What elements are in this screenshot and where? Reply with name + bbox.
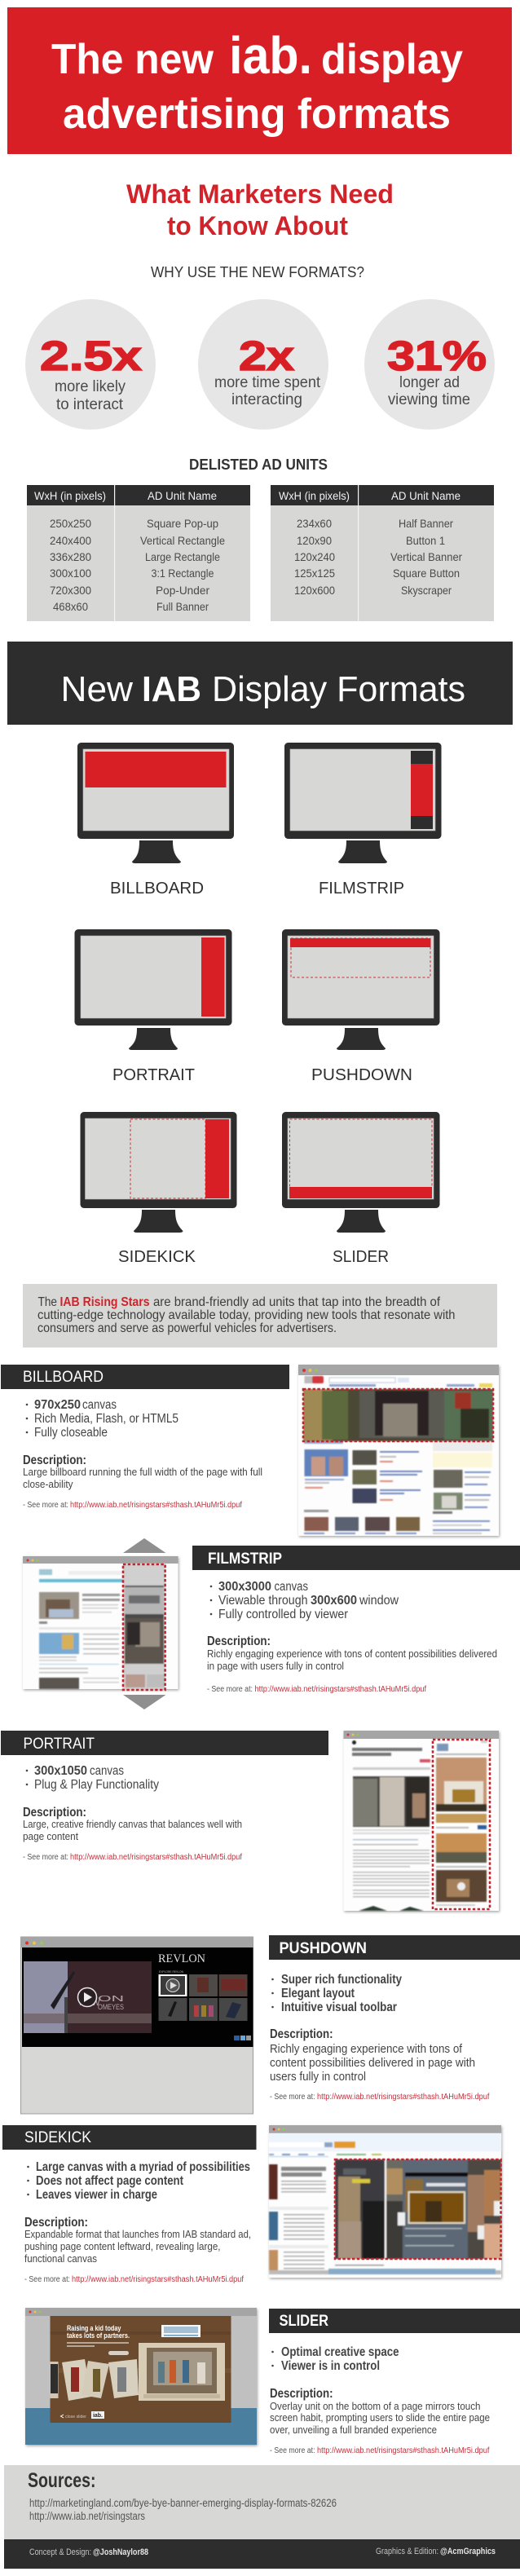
slider description: screen habit, prompting users to slide the entire page: [270, 2411, 490, 2424]
pushdown description: users fully in control: [270, 2070, 366, 2084]
section banner: new IAB display formats: [7, 642, 513, 725]
billboard screenshot: [298, 1365, 499, 1536]
sources panel: [4, 2465, 520, 2539]
billboard feature list: Fully closeable: [34, 1426, 108, 1440]
billboard description: Large billboard running the full width of the page with full: [23, 1466, 262, 1478]
callout: IAB rising stars: IAB Rising Stars: [60, 1295, 150, 1309]
table: delisted units left: 720x300: [50, 584, 91, 597]
slider heading: SLIDER: [279, 2313, 328, 2330]
sidekick screenshot: [269, 2125, 501, 2278]
filmstrip feature list: Viewable through: [218, 1594, 308, 1608]
sidekick heading: SIDEKICK: [24, 2129, 91, 2146]
slider screenshot: Raising a kid today: [67, 2324, 121, 2332]
table: delisted units left: Large Rectangle: [145, 550, 220, 563]
table: delisted units left: 3:1 Rectangle: [152, 567, 214, 580]
monitor: portrait: PORTRAIT: [112, 1066, 195, 1084]
billboard description: close-ability: [23, 1478, 73, 1490]
billboard description: - See more at:: [23, 1501, 68, 1510]
sources panel: http://marketingland.com/bye-bye-banner-emerging-display-formats-82626: [29, 2497, 337, 2509]
slider screenshot: iab.: [93, 2413, 103, 2419]
filmstrip heading: FILMSTRIP: [208, 1550, 282, 1568]
monitor: filmstrip: FILMSTRIP: [319, 880, 404, 898]
sidekick description: Expandable format that launches from IAB standard ad,: [24, 2228, 251, 2240]
section banner: new IAB display formats: Display Formats: [212, 669, 465, 709]
filmstrip down arrow: [123, 1695, 166, 1709]
filmstrip up arrow: [123, 1538, 166, 1553]
table: delisted units left: WxH (in pixels): [34, 489, 106, 502]
footer credits: @AcmGraphics: [440, 2547, 496, 2556]
monitor: slider: [282, 1112, 440, 1266]
filmstrip feature list: window: [359, 1594, 399, 1608]
billboard feature list: [26, 1398, 178, 1440]
filmstrip description: - See more at:: [207, 1685, 253, 1694]
filmstrip screenshot: [23, 1556, 178, 1690]
sidekick description: Description:: [24, 2216, 88, 2230]
sidekick description: functional canvas: [24, 2252, 97, 2265]
billboard description: http://www.iab.net/risingstars#sthash.tAHuMr5i.dpuf: [70, 1501, 242, 1510]
heading: delisted ad units: DELISTED AD UNITS: [189, 456, 328, 473]
pushdown description: content possibilities delivered in page with: [270, 2056, 475, 2070]
sidekick heading: [2, 2125, 256, 2150]
slider heading: [269, 2309, 520, 2333]
filmstrip feature list: 300x3000: [218, 1580, 271, 1594]
callout: IAB rising stars: [23, 1284, 497, 1348]
monitor: billboard: BILLBOARD: [110, 880, 204, 898]
table: delisted units left: Pop-Under: [156, 584, 209, 597]
slider feature list: Viewer is in control: [281, 2359, 380, 2373]
table: delisted units left: 336x280: [50, 550, 91, 563]
table: delisted units left: Full Banner: [156, 600, 209, 613]
monitor: sidekick: [80, 1112, 236, 1266]
table: delisted units left: Square Pop-up: [147, 517, 218, 530]
portrait heading: PORTRAIT: [23, 1736, 95, 1753]
table: delisted units right: Skyscraper: [401, 584, 452, 597]
filmstrip description: Description:: [207, 1634, 271, 1648]
portrait heading: [1, 1731, 328, 1755]
stat circle: 2x: more time spent: [214, 374, 321, 391]
panel: sidekick: [2, 2125, 501, 2284]
portrait description: - See more at:: [23, 1853, 68, 1862]
table: delisted units left: [27, 485, 250, 621]
billboard heading: BILLBOARD: [23, 1369, 104, 1386]
section banner: new IAB display formats: New: [60, 669, 133, 709]
callout: IAB rising stars: The: [37, 1295, 57, 1309]
filmstrip feature list: 300x600: [311, 1594, 357, 1608]
footer credits: Concept & Design:: [29, 2547, 91, 2557]
monitor: pushdown: PUSHDOWN: [311, 1066, 412, 1084]
billboard feature list: Rich Media, Flash, or HTML5: [34, 1412, 178, 1426]
sidekick description: http://www.iab.net/risingstars#sthash.tAHuMr5i.dpuf: [72, 2275, 244, 2284]
table: delisted units right: 120x90: [297, 534, 332, 547]
footer credits: @JoshNaylor88: [93, 2547, 148, 2557]
heading: what marketers need to know: [126, 179, 394, 240]
stat circle: 31%: 31%: [387, 333, 487, 379]
callout: IAB rising stars: cutting-edge technology available today, providing new tools that resonate with: [37, 1308, 455, 1322]
portrait feature list: Plug & Play Functionality: [34, 1778, 159, 1792]
panel: filmstrip: [23, 1538, 520, 1709]
portrait feature list: [26, 1764, 159, 1792]
table: delisted units right: 125x125: [294, 567, 335, 580]
pushdown screenshot: [20, 1937, 253, 2114]
sources panel: http://www.iab.net/risingstars: [29, 2510, 145, 2522]
callout: IAB rising stars: consumers and serve as powerful vehicles for advertisers.: [37, 1321, 337, 1335]
stat circle: 31%: [364, 299, 495, 430]
panel: billboard: [1, 1365, 499, 1536]
filmstrip feature list: Fully controlled by viewer: [218, 1608, 348, 1621]
slider screenshot: close slider: [65, 2415, 86, 2419]
billboard heading: [1, 1365, 289, 1389]
pushdown description: Richly engaging experience with tons of: [270, 2042, 463, 2056]
sidekick description: pushing page content leftward, revealing large,: [24, 2240, 220, 2252]
billboard feature list: 970x250: [34, 1398, 81, 1412]
stat circle: 2.5x: to interact: [56, 396, 124, 413]
stat circle: 2.5x: more likely: [55, 378, 126, 395]
section banner: new IAB display formats: IAB: [142, 669, 201, 709]
table: delisted units right: Half Banner: [399, 517, 453, 530]
portrait screenshot: [344, 1731, 499, 1911]
sidekick feature list: Leaves viewer in charge: [36, 2188, 157, 2202]
table: delisted units right: AD Unit Name: [391, 489, 461, 502]
billboard feature list: canvas: [82, 1398, 117, 1412]
sidekick description: [24, 2216, 251, 2284]
pushdown feature list: Elegant layout: [281, 1987, 355, 2000]
stat circle: 2x: interacting: [231, 391, 302, 408]
title banner: iab.: [229, 26, 312, 85]
pushdown feature list: [271, 1973, 402, 2014]
portrait description: page content: [23, 1830, 78, 1842]
pushdown feature list: Super rich functionality: [281, 1973, 402, 1987]
table: delisted units right: 120x600: [294, 584, 335, 597]
table: delisted units left: 300x100: [50, 567, 91, 580]
table: delisted units left: 468x60: [53, 600, 88, 613]
footer credits: Graphics & Edition:: [376, 2547, 438, 2556]
table: delisted units right: WxH (in pixels): [279, 489, 350, 502]
panel: portrait: [1, 1731, 499, 1911]
sidekick feature list: Does not affect page content: [36, 2174, 183, 2188]
table: delisted units right: 234x60: [297, 517, 332, 530]
slider feature list: [271, 2345, 399, 2373]
filmstrip feature list: [210, 1580, 399, 1621]
stat circle: 2x: 2x: [239, 333, 294, 379]
sidekick feature list: Large canvas with a myriad of possibilities: [36, 2160, 250, 2174]
title banner: [7, 7, 512, 154]
pushdown feature list: Intuitive visual toolbar: [281, 2000, 397, 2014]
heading: what marketers need to know: What Marketers Need: [126, 179, 394, 209]
pushdown screenshot: ON: [98, 1995, 124, 2004]
sidekick description: - See more at:: [24, 2275, 70, 2284]
pushdown screenshot: REVLON: [158, 1952, 205, 1965]
billboard description: Description:: [23, 1453, 86, 1467]
slider screenshot: takes lots of partners.: [67, 2331, 130, 2340]
table: delisted units left: Vertical Rectangle: [140, 534, 225, 547]
slider feature list: Optimal creative space: [281, 2345, 399, 2359]
table: delisted units left: 240x400: [50, 534, 91, 547]
stat circle: 31%: viewing time: [388, 391, 470, 408]
slider description: http://www.iab.net/risingstars#sthash.tAHuMr5i.dpuf: [317, 2446, 490, 2455]
monitor: sidekick: SIDEKICK: [118, 1248, 196, 1266]
slider description: Overlay unit on the bottom of a page mirrors touch: [270, 2400, 481, 2412]
title banner: advertising formats: [63, 90, 451, 138]
portrait description: [23, 1806, 242, 1862]
stat circle: 2.5x: [25, 299, 156, 430]
stat circle: 2.5x: 2.5x: [40, 333, 142, 379]
pushdown description: Description:: [270, 2027, 333, 2041]
pushdown screenshot: EXPLORE REVLON: [159, 1969, 183, 1974]
stat circle: 2x: [198, 299, 328, 430]
filmstrip description: http://www.iab.net/risingstars#sthash.tAHuMr5i.dpuf: [254, 1685, 426, 1694]
filmstrip feature list: canvas: [274, 1580, 308, 1594]
title banner: display: [321, 36, 463, 83]
sidekick feature list: [27, 2160, 250, 2202]
table: delisted units right: Square Button: [393, 567, 460, 580]
sources panel: Sources:: [28, 2469, 96, 2492]
slider description: - See more at:: [270, 2446, 315, 2455]
pushdown screenshot: NEW: [79, 1998, 100, 2008]
pushdown screenshot: OMEYES: [98, 2003, 124, 2011]
pushdown description: [270, 2027, 490, 2102]
monitor: slider: SLIDER: [333, 1248, 389, 1266]
monitor: filmstrip: [284, 743, 442, 898]
heading: what marketers need to know: to Know About: [167, 211, 348, 240]
monitor: pushdown: [282, 929, 440, 1084]
pushdown heading: PUSHDOWN: [279, 1940, 367, 1957]
portrait feature list: 300x1050: [34, 1764, 87, 1778]
filmstrip heading: [192, 1546, 520, 1570]
pushdown description: - See more at:: [270, 2093, 315, 2102]
panel: slider: [25, 2308, 520, 2455]
table: delisted units left: 250x250: [50, 517, 91, 530]
table: delisted units left: AD Unit Name: [148, 489, 217, 502]
filmstrip description: [207, 1634, 497, 1694]
filmstrip description: in page with users fully in control: [207, 1660, 344, 1672]
portrait description: Description:: [23, 1806, 86, 1820]
footer credits: [4, 2539, 520, 2569]
slider screenshot: [25, 2308, 257, 2445]
pushdown description: http://www.iab.net/risingstars#sthash.tAHuMr5i.dpuf: [317, 2093, 490, 2102]
monitor: portrait: [75, 929, 231, 1084]
table: delisted units right: Button 1: [406, 534, 445, 547]
title banner: The new: [51, 36, 214, 83]
billboard description: [23, 1453, 262, 1510]
portrait description: Large, creative friendly canvas that balances well with: [23, 1818, 242, 1830]
pushdown heading: [269, 1935, 520, 1960]
monitor: billboard: [77, 743, 234, 898]
callout: IAB rising stars: are brand-friendly ad units that tap into the breadth of: [153, 1295, 441, 1309]
stat circle: 31%: longer ad: [399, 374, 460, 391]
slider description: Description:: [270, 2387, 333, 2401]
portrait feature list: canvas: [90, 1764, 124, 1778]
slider description: [270, 2387, 490, 2455]
table: delisted units right: 120x240: [294, 550, 335, 563]
portrait description: http://www.iab.net/risingstars#sthash.tAHuMr5i.dpuf: [70, 1853, 242, 1862]
table: delisted units right: [271, 485, 494, 621]
table: delisted units right: Vertical Banner: [390, 550, 462, 563]
heading: why use the new formats: WHY USE THE NEW FORMATS?: [151, 263, 364, 280]
panel: pushdown: [20, 1935, 520, 2114]
slider description: over, unveiling a full branded experience: [270, 2424, 437, 2436]
